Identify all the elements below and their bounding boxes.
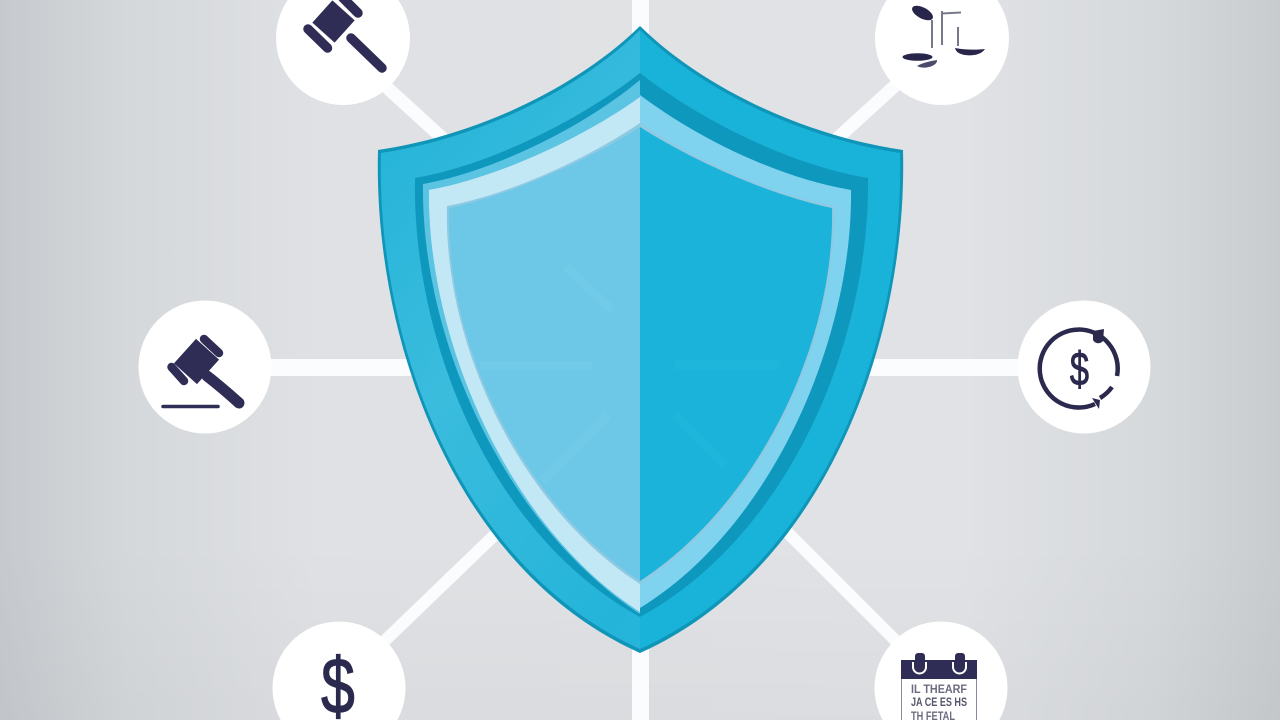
icon: gavel with base <box>163 339 239 406</box>
shield panel right <box>640 127 832 581</box>
icon circle: gavel top left <box>276 0 410 105</box>
icon circle: dollar cycle right <box>1018 300 1150 434</box>
shield medium band left <box>423 80 640 614</box>
icon: circular dollar arrows: $ <box>1070 343 1089 395</box>
shield outer edge <box>378 26 903 653</box>
icon circle: dollar bottom left <box>272 622 406 720</box>
shield light band right <box>640 95 851 608</box>
icon: calendar <box>901 653 977 720</box>
shield rim right <box>640 30 900 649</box>
icon: scales of justice <box>902 3 985 68</box>
connector lines <box>260 0 1030 720</box>
icon: calendar: IL THEARF <box>911 682 967 696</box>
icon circle: gavel left <box>138 300 272 434</box>
shield inner dark band <box>415 73 868 617</box>
shield panel left <box>448 127 640 581</box>
shield light band left <box>428 97 640 612</box>
shield panel shadow edge <box>447 123 834 584</box>
shield rim left <box>380 30 640 649</box>
shield <box>378 26 903 653</box>
icon circle: calendar bottom right <box>874 622 1008 720</box>
icon: calendar: JA CE ES HS <box>911 695 967 709</box>
faint connector reflections <box>480 267 780 481</box>
icon: gavel <box>308 0 382 68</box>
icon circle: scales top right <box>875 0 1009 105</box>
